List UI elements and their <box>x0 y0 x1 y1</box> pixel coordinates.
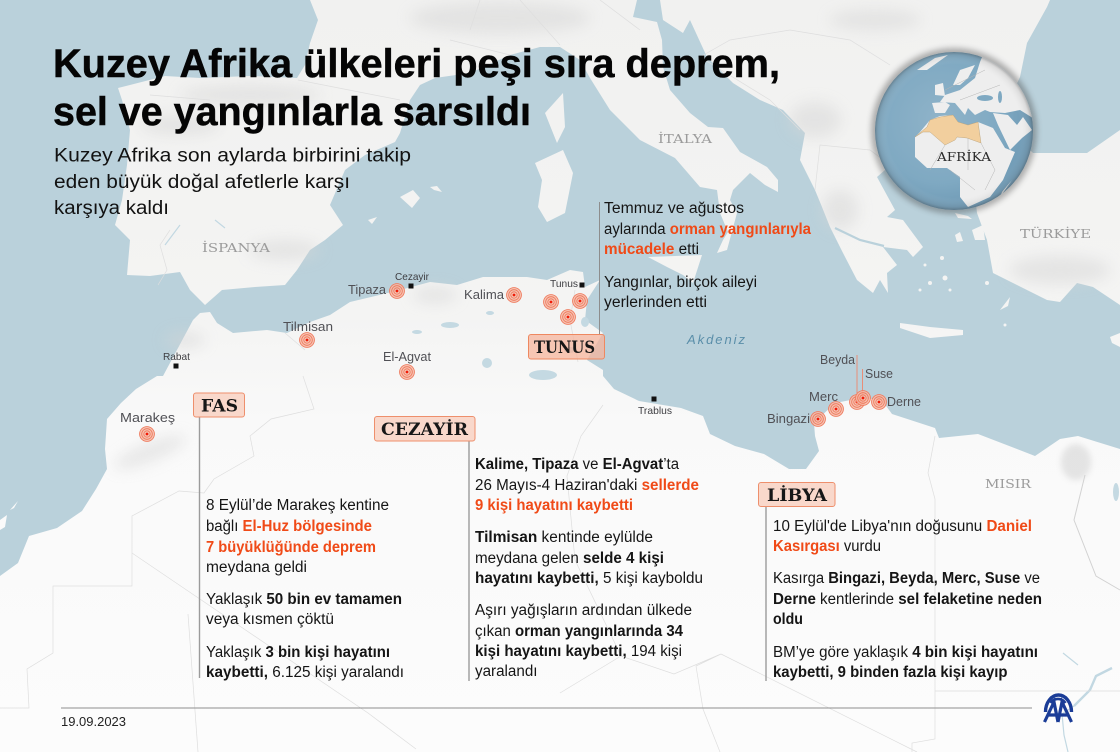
markers: disaster locations <box>139 283 887 442</box>
text block: 10 Eylül'de Libya'nın doğusunu Daniel <box>773 518 1032 535</box>
leader line <box>198 416 200 678</box>
text block: Aşırı yağışların ardından ülkede <box>475 602 692 619</box>
country tag: TUNUS <box>534 338 595 357</box>
label: Türkiye: TÜRKİYE <box>1020 225 1091 241</box>
text block: veya kısmen çöktü <box>206 611 334 628</box>
text block: Yaklaşık 50 bin ev tamamen <box>206 591 402 608</box>
country tag <box>374 416 475 441</box>
title: Kuzey Afrika ülkeleri peşi sıra deprem, <box>53 42 780 86</box>
date: 19.09.2023 <box>61 714 126 729</box>
country tag <box>758 482 835 506</box>
text block: kaybetti, 9 binden fazla kişi kayıp <box>773 664 1008 681</box>
text block: mücadele etti <box>604 241 699 258</box>
text block: aylarında orman yangınlarıyla <box>604 221 811 238</box>
label: country names <box>202 131 1091 491</box>
map: city labels and square markers: El-Agvat <box>383 349 431 364</box>
leader line <box>468 441 470 681</box>
text block: hayatını kaybetti, 5 kişi kayboldu <box>475 570 703 587</box>
map: city labels and square markers: Beyda <box>820 352 856 367</box>
panel: Tunus <box>528 200 811 359</box>
label: İtalya: İTALYA <box>658 131 713 146</box>
map: city labels and square markers: Tilmisan <box>283 319 333 334</box>
text block <box>773 518 1042 681</box>
title <box>53 42 780 134</box>
map: city labels and square markers: Marakeş <box>120 410 176 425</box>
subtitle: eden büyük doğal afetlerle karşı <box>54 172 350 193</box>
map: city labels and square markers: Trablus <box>638 405 672 417</box>
globe land <box>875 50 1040 210</box>
label: Akdeniz: Akdeniz <box>686 332 746 347</box>
label: Mısır: MISIR <box>985 476 1032 491</box>
text block: BM’ye göre yaklaşık 4 bin kişi hayatını <box>773 644 1038 661</box>
text block: Yaklaşık 3 bin kişi hayatını <box>206 644 390 661</box>
text block: kişi hayatını kaybetti, 194 kişi <box>475 643 682 660</box>
panel: Fas <box>194 393 404 681</box>
text block: oldu <box>773 611 803 628</box>
text block: 7 büyüklüğünde deprem <box>206 539 376 556</box>
subtitle <box>54 146 411 219</box>
map: city labels and square markers: Rabat <box>163 351 190 363</box>
globe: seas on land <box>977 91 1002 103</box>
text block: Kalime, Tipaza ve El-Agvat’ta <box>475 456 679 473</box>
map: city labels and square markers: Tipaza <box>348 282 387 297</box>
text block: Kasırga Bingazi, Beyda, Merc, Suse ve <box>773 570 1040 587</box>
text block: Kasırgası vurdu <box>773 538 881 555</box>
map: relief shading <box>111 2 1110 475</box>
text block: çıkan orman yangınlarında 34 <box>475 623 683 640</box>
country tag: LİBYA <box>767 485 827 505</box>
text block <box>206 497 404 681</box>
panel: Cezayir <box>374 416 703 681</box>
map: city labels and square markers: Suse <box>865 366 893 381</box>
country tag <box>194 393 244 417</box>
footer rule <box>61 707 1032 709</box>
text block: yaralandı <box>475 663 538 680</box>
map: city labels and square markers: Derne <box>887 394 921 409</box>
globe: North Africa highlight <box>915 115 981 145</box>
icon: AA logo <box>1044 695 1072 722</box>
map: city labels and square markers: Bingazi <box>767 411 810 426</box>
map: lakes and rivers <box>165 220 1120 752</box>
country tag: CEZAYİR <box>381 419 468 439</box>
leader line <box>765 506 767 681</box>
country tag: FAS <box>201 396 238 416</box>
text block: Tilmisan kentinde eylülde <box>475 529 653 546</box>
country tag <box>528 334 604 359</box>
text block: 9 kişi hayatını kaybetti <box>475 497 633 514</box>
text block <box>475 456 703 680</box>
text block: 8 Eylül’de Marakeş kentine <box>206 497 389 514</box>
globe label: AFRİKA <box>936 149 992 164</box>
map: Nile delta <box>1061 444 1091 480</box>
map: city labels and square markers: Tunus <box>550 278 578 290</box>
leader line <box>598 202 600 334</box>
globe shadow <box>871 48 1037 214</box>
text block: Yangınlar, birçok aileyi <box>604 274 757 291</box>
text block: kaybetti, 6.125 kişi yaralandı <box>206 664 404 681</box>
map: city labels and square markers: Kalima <box>464 287 505 302</box>
text block: bağlı El-Huz bölgesinde <box>206 518 372 535</box>
text block: Derne kentlerinde sel felaketine neden <box>773 591 1042 608</box>
subtitle: karşıya kaldı <box>54 198 169 219</box>
panel: Libya <box>758 482 1042 681</box>
text block: meydana geldi <box>206 559 307 576</box>
text block: yerlerinden etti <box>604 294 707 311</box>
subtitle: Kuzey Afrika son aylarda birbirini takip <box>54 146 411 166</box>
title: sel ve yangınlarla sarsıldı <box>53 90 531 134</box>
map: Gulf of Corinth <box>835 228 884 246</box>
text block: 26 Mayıs-4 Haziran'daki sellerde <box>475 477 699 494</box>
leader lines: Beyda and Suse <box>857 355 862 402</box>
label: İspanya: İSPANYA <box>202 240 271 255</box>
globe inset <box>871 48 1040 214</box>
map: city labels and square markers <box>120 271 921 426</box>
map: city labels and square markers: Merc <box>809 389 838 404</box>
text block <box>604 200 811 311</box>
map: city labels and square markers: Cezayir <box>395 271 429 283</box>
text block: Temmuz ve ağustos <box>604 200 744 217</box>
text block: meydana gelen selde 4 kişi <box>475 550 664 567</box>
